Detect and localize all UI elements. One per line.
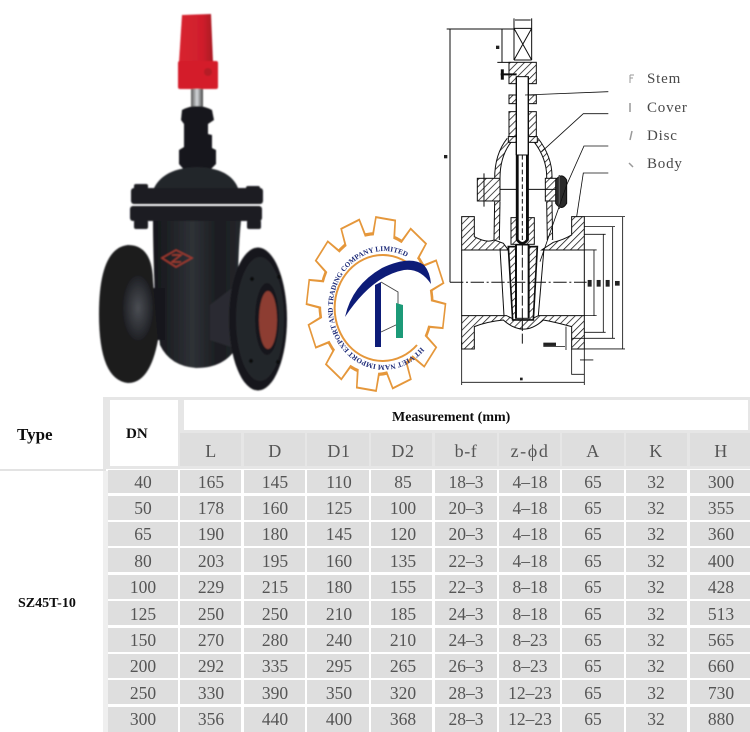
row DN 40: 165 — [198, 472, 224, 492]
row DN 200: 8–23 — [512, 656, 548, 676]
parts legend — [629, 71, 688, 172]
photo: black gate valve with red cap — [99, 14, 287, 390]
row DN 40: 145 — [262, 472, 288, 492]
table header frame — [103, 397, 750, 469]
row DN 40: 85 — [394, 472, 412, 492]
bonnet flange — [477, 173, 567, 209]
row DN 300: 12–23 — [508, 709, 552, 729]
row DN 300 — [130, 709, 734, 729]
row DN 125: 32 — [647, 604, 665, 624]
row DN 65: 20–3 — [448, 524, 484, 544]
row DN 65: 360 — [708, 524, 734, 544]
connecting neck right — [210, 285, 240, 350]
heading: DN: DN — [126, 426, 148, 442]
column header cells — [180, 433, 750, 466]
row DN 40: 40 — [134, 472, 152, 492]
row DN 40: 18–3 — [448, 472, 484, 492]
row DN 50: 32 — [647, 498, 665, 518]
centre line — [450, 281, 587, 284]
row DN 250: 250 — [130, 683, 156, 703]
row DN 125: 250 — [198, 604, 224, 624]
row DN 50: 178 — [198, 498, 224, 518]
pipe body and flanges — [462, 217, 584, 349]
row DN 100: 22–3 — [448, 577, 484, 597]
row DN 250: 330 — [198, 683, 224, 703]
logo building: outlines — [381, 282, 398, 332]
row DN 65: 65 — [584, 524, 602, 544]
row DN 100: 100 — [130, 577, 156, 597]
row DN 80: 195 — [262, 551, 288, 571]
column header cells: L — [205, 441, 217, 461]
column header cells: z-ϕd — [511, 441, 549, 461]
row DN 65: 145 — [326, 524, 352, 544]
logo building: blue tower — [375, 282, 381, 347]
gear outline — [307, 218, 445, 390]
row DN 200: 32 — [647, 656, 665, 676]
row DN 200: 660 — [708, 656, 734, 676]
row DN 125: 24–3 — [448, 604, 484, 624]
row DN 50: 65 — [584, 498, 602, 518]
row DN 125: 125 — [130, 604, 156, 624]
row DN 150: 270 — [198, 630, 224, 650]
row DN 40: 32 — [647, 472, 665, 492]
row DN 150: 280 — [262, 630, 288, 650]
row DN 80: 4–18 — [512, 551, 548, 571]
row DN 100 — [130, 577, 734, 597]
bonnet neck — [179, 106, 216, 172]
row DN 80: 22–3 — [448, 551, 484, 571]
row DN 200: 265 — [390, 656, 416, 676]
dome — [154, 167, 238, 188]
row DN 300: 440 — [262, 709, 288, 729]
row DN 50: 125 — [326, 498, 352, 518]
row DN 200: 200 — [130, 656, 156, 676]
row DN 80: 80 — [134, 551, 152, 571]
row DN 125: 210 — [326, 604, 352, 624]
column header cells: D2 — [391, 441, 415, 461]
row DN 200: 65 — [584, 656, 602, 676]
row DN 65: 4–18 — [512, 524, 548, 544]
column header cells: H — [714, 441, 728, 461]
row DN 150: 210 — [390, 630, 416, 650]
row DN 250: 12–23 — [508, 683, 552, 703]
bonnet shell — [497, 140, 550, 240]
row DN 100: 215 — [262, 577, 288, 597]
row DN 300: 300 — [130, 709, 156, 729]
row DN 40: 300 — [708, 472, 734, 492]
row DN 40: 4–18 — [512, 472, 548, 492]
legend: cover: Cover — [647, 100, 688, 116]
row DN 125 — [130, 604, 734, 624]
body emblem — [162, 250, 192, 267]
row DN 50: 100 — [390, 498, 416, 518]
row DN 65: 120 — [390, 524, 416, 544]
row DN 250: 320 — [390, 683, 416, 703]
column header cells: D — [268, 441, 282, 461]
divider under Type — [0, 469, 106, 471]
row DN 40 — [134, 472, 734, 492]
row DN 250: 730 — [708, 683, 734, 703]
technical drawing: valve cross-section — [444, 18, 625, 385]
red handwheel cap — [178, 14, 218, 89]
row DN 150: 150 — [130, 630, 156, 650]
bolted flange plates — [130, 184, 263, 229]
leader lines — [525, 92, 608, 262]
row DN 250: 350 — [326, 683, 352, 703]
circular company name: HT VIET NAM IMPORT EXPORT AND TRADING COMPANY LIMITED — [328, 246, 424, 370]
row DN 250 — [130, 683, 734, 703]
row DN 300: 400 — [326, 709, 352, 729]
left flange — [99, 245, 165, 383]
row DN 50: 50 — [134, 498, 152, 518]
row DN 300: 65 — [584, 709, 602, 729]
row DN 150: 565 — [708, 630, 734, 650]
row DN 125: 65 — [584, 604, 602, 624]
column header cells: A — [586, 441, 600, 461]
inner orange ring — [335, 255, 417, 361]
row DN 40: 110 — [326, 472, 352, 492]
row DN 65: 180 — [262, 524, 288, 544]
stem and packing — [508, 77, 537, 155]
row DN 80: 135 — [390, 551, 416, 571]
row DN 100: 229 — [198, 577, 224, 597]
row DN 100: 32 — [647, 577, 665, 597]
left side band — [103, 471, 108, 732]
row DN 40: 65 — [584, 472, 602, 492]
legend: stem: Stem — [647, 71, 681, 87]
row DN 80: 65 — [584, 551, 602, 571]
top dimension and handle — [447, 18, 532, 282]
row DN 80: 32 — [647, 551, 665, 571]
right flange with bore — [229, 248, 287, 390]
row DN 300: 28–3 — [448, 709, 484, 729]
row DN 200: 295 — [326, 656, 352, 676]
column header cells: D1 — [327, 441, 351, 461]
row DN 200: 26–3 — [448, 656, 484, 676]
row DN 150: 240 — [326, 630, 352, 650]
row DN 150: 24–3 — [448, 630, 484, 650]
row DN 150: 65 — [584, 630, 602, 650]
valve body — [153, 221, 241, 368]
row DN 125: 513 — [708, 604, 734, 624]
type name: SZ45T-10 — [18, 596, 76, 611]
row DN 200 — [130, 656, 734, 676]
valve stem — [191, 86, 203, 112]
row DN 300: 880 — [708, 709, 734, 729]
row DN 200: 335 — [262, 656, 288, 676]
row DN 80 — [134, 551, 734, 571]
row DN 250: 32 — [647, 683, 665, 703]
row DN 65: 65 — [134, 524, 152, 544]
row DN 65 — [134, 524, 734, 544]
disc wedge — [500, 155, 544, 345]
row DN 150 — [130, 630, 734, 650]
column header cells: b-f — [455, 441, 477, 461]
row DN 250: 390 — [262, 683, 288, 703]
row DN 125: 185 — [390, 604, 416, 624]
row DN 50: 160 — [262, 498, 288, 518]
row DN 100: 155 — [390, 577, 416, 597]
row DN 300: 356 — [198, 709, 224, 729]
row DN 50: 20–3 — [448, 498, 484, 518]
row DN 65: 32 — [647, 524, 665, 544]
left column heading: Type: Type — [17, 425, 53, 444]
row DN 250: 65 — [584, 683, 602, 703]
row DN 50 — [134, 498, 734, 518]
stem nut with bolt — [501, 62, 536, 84]
row DN 100: 8–18 — [512, 577, 548, 597]
row DN 80: 160 — [326, 551, 352, 571]
row DN 300: 32 — [647, 709, 665, 729]
dimension labels — [444, 46, 620, 380]
row DN 50: 4–18 — [512, 498, 548, 518]
cell backgrounds — [108, 470, 750, 732]
row DN 50: 355 — [708, 498, 734, 518]
row DN 150: 8–23 — [512, 630, 548, 650]
row DN 65: 190 — [198, 524, 224, 544]
logo swoosh — [345, 261, 431, 317]
dimension lines — [462, 217, 625, 385]
specification table — [0, 397, 750, 732]
row DN 100: 65 — [584, 577, 602, 597]
row DN 80: 400 — [708, 551, 734, 571]
heading: Measurement: Measurement (mm) — [392, 410, 511, 425]
row DN 100: 428 — [708, 577, 734, 597]
logo building: green tower — [396, 303, 403, 338]
row DN 200: 292 — [198, 656, 224, 676]
row DN 150: 32 — [647, 630, 665, 650]
row DN 250: 28–3 — [448, 683, 484, 703]
row DN 80: 203 — [198, 551, 224, 571]
company logo: gear badge — [306, 216, 446, 392]
row DN 125: 8–18 — [512, 604, 548, 624]
row DN 300: 368 — [390, 709, 416, 729]
row DN 125: 250 — [262, 604, 288, 624]
legend: body: Body — [647, 156, 683, 172]
legend: disc: Disc — [647, 128, 678, 144]
column header cells: K — [649, 441, 663, 461]
row DN 100: 180 — [326, 577, 352, 597]
